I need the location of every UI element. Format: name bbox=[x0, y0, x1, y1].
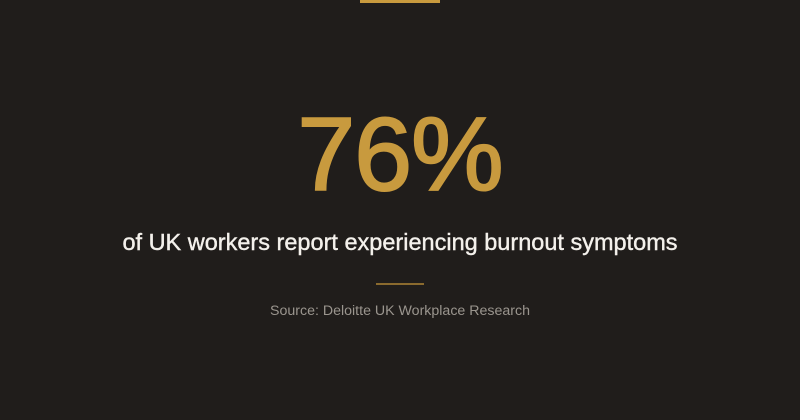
top accent bar bbox=[360, 0, 440, 3]
source: Source: Deloitte UK Workplace Research bbox=[270, 303, 530, 319]
divider bbox=[376, 283, 424, 285]
subtitle: of UK workers report experiencing burnout symptoms bbox=[122, 229, 678, 255]
big statistic: 76% bbox=[297, 97, 503, 213]
